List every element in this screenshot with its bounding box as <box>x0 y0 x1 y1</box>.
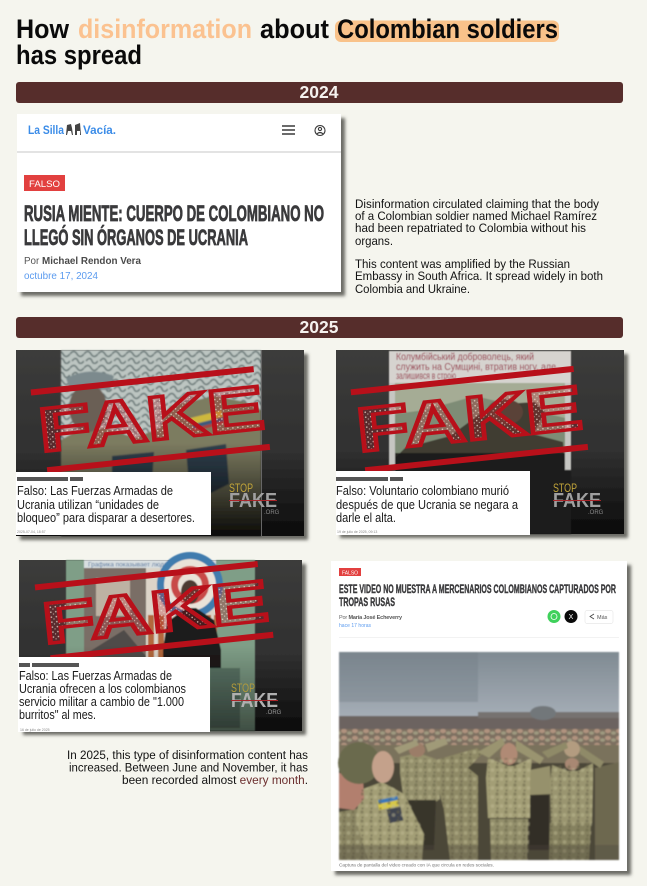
right soldier <box>550 763 593 823</box>
text block: 2024 description: organs. <box>355 234 393 248</box>
article headline: LLEGÓ SIN ÓRGANOS DE UCRANIA <box>24 225 248 250</box>
logo: StopFake <box>229 483 280 516</box>
section header: 2024: 2024 <box>300 82 339 102</box>
icon: user <box>315 126 325 136</box>
caption box: 2025-07-04, 18:57 <box>17 530 46 534</box>
tag: FALSO <box>339 568 361 576</box>
photo: wounded volunteer article: Колумбійський доброволець, який <box>396 351 534 363</box>
date: octubre 17, 2024 <box>24 271 98 282</box>
section header: 2025: 2025 <box>300 317 339 337</box>
stamp: FAKE: FAKE <box>353 373 585 466</box>
logo: StopFake: FAKE <box>231 690 278 712</box>
caption box: 16 de julio de 2025 <box>20 728 50 732</box>
left soldier <box>339 808 367 860</box>
icon: WhatsApp <box>548 610 560 623</box>
caption box <box>336 471 530 535</box>
button: Más <box>585 610 613 624</box>
text block: 2025 description <box>67 748 308 787</box>
text block: 2024 description <box>355 197 603 296</box>
byline: Por María José Echeverry <box>339 615 403 621</box>
text block: 2024 description: Embassy in South Africa. It spread widely in both <box>355 269 603 283</box>
logo: StopFake: FAKE <box>229 490 277 512</box>
icon: X: X <box>569 614 574 621</box>
title: How <box>16 14 70 44</box>
text block: 2024 description: Disinformation circulated claiming that the body <box>355 197 600 211</box>
tag: FALSO <box>24 175 65 191</box>
logo: StopFake: .ORG <box>266 710 282 716</box>
panel: fake card 2 <box>336 350 624 535</box>
caption box: Falso: Las Fuerzas Armadas de <box>17 484 173 498</box>
logo: StopFake: STOP <box>553 483 577 495</box>
photo: man with target mural <box>66 552 255 731</box>
panel: La Silla Vacía article 2024 <box>17 114 341 292</box>
section header: 2025 <box>16 317 623 338</box>
photo: wounded volunteer article: служить на Сумщині, втратив ногу, але <box>396 362 556 373</box>
article headline <box>339 582 616 609</box>
center soldier <box>486 758 532 818</box>
background soldiers <box>339 738 619 860</box>
logo: La Silla Vacía: La Silla <box>28 123 64 137</box>
caption box: Falso: Voluntario colombiano murió <box>336 484 509 498</box>
photo: wounded volunteer article: залишився в строю <box>396 371 456 382</box>
caption box: 19 de julio de 2025, 09:13 <box>337 530 377 534</box>
caption box <box>18 657 210 732</box>
caption box: Falso: Las Fuerzas Armadas de <box>19 669 172 683</box>
text block: 2024 description: of a Colombian soldier named Michael Ramírez <box>355 209 597 223</box>
title <box>16 14 559 70</box>
panel: La Silla Vacía article 2025 <box>331 561 627 871</box>
text block: 2024 description: This content was amplified by the Russian <box>355 257 570 271</box>
photo: soldier <box>61 350 261 536</box>
logo: StopFake <box>553 483 604 516</box>
title: about <box>260 14 329 44</box>
article headline: RUSIA MIENTE: CUERPO DE COLOMBIANO NO <box>24 201 324 226</box>
button: Más: Más <box>597 615 608 621</box>
photo: wounded volunteer article <box>389 351 571 534</box>
caption box: Ucrania ofrecen a los colombianos <box>19 682 186 696</box>
caption box: servicio militar a cambio de "1.000 <box>19 695 184 709</box>
text block: 2024 description: had been repatriated to Colombia without his <box>355 221 586 235</box>
title: disinformation <box>78 14 252 44</box>
text block: 2025 description: been recorded almost every month. <box>122 773 308 787</box>
title: has spread <box>16 40 142 70</box>
logo: StopFake: FAKE <box>553 490 601 512</box>
logo: StopFake <box>231 683 282 716</box>
icon: menu <box>282 126 295 134</box>
date: hace 17 horas <box>339 623 372 629</box>
stamp: FAKE <box>31 365 270 474</box>
caption box <box>16 472 211 535</box>
logo: StopFake: .ORG <box>264 510 280 516</box>
text block: 2024 description: Colombia and Ukraine. <box>355 282 470 296</box>
photo: man with target mural: Графика показывает людям какой пруд <box>88 562 207 568</box>
photo caption: Captura de pantalla del video creado con IA que circula en redes sociales. <box>339 862 494 868</box>
caption box: bloqueo” para disparar a desertores. <box>17 511 195 525</box>
caption box: después de que Ucrania se negara a <box>336 498 518 512</box>
camouflage texture <box>339 748 593 860</box>
logo: La Silla Vacía <box>28 123 116 137</box>
section header: 2024 <box>16 82 623 103</box>
caption box: Ucrania utilizan “unidades de <box>17 498 159 512</box>
article headline: TROPAS RUSAS <box>339 595 395 609</box>
stamp: FAKE <box>351 365 588 474</box>
tag: FALSO: FALSO <box>29 179 60 190</box>
article headline <box>24 201 324 250</box>
caption box: burritos" al mes. <box>19 708 96 722</box>
logo: StopFake: .ORG <box>588 510 604 516</box>
stamp: FAKE: FAKE <box>35 373 267 466</box>
tag: FALSO: FALSO <box>342 570 359 576</box>
photo: soldiers with hands on heads <box>338 652 619 860</box>
title: Colombian soldiers <box>337 14 558 44</box>
text block: 2025 description: In 2025, this type of disinformation content has <box>67 748 308 762</box>
icon: X <box>564 610 578 623</box>
back-facing soldier <box>436 748 482 860</box>
logo: La Silla Vacía: Vacía. <box>83 123 116 137</box>
caption box: darle el alta. <box>336 511 396 525</box>
panel: fake card 3 <box>18 552 302 732</box>
stamp: FAKE <box>35 560 274 662</box>
logo: StopFake: STOP <box>229 483 253 495</box>
byline: Por Michael Rendon Vera <box>24 256 141 267</box>
panel: fake card 1 <box>16 350 304 536</box>
stamp: FAKE: FAKE <box>39 568 271 657</box>
text block: 2025 description: increased. Between June and November, it has <box>69 760 308 774</box>
logo: StopFake: STOP <box>231 683 255 695</box>
